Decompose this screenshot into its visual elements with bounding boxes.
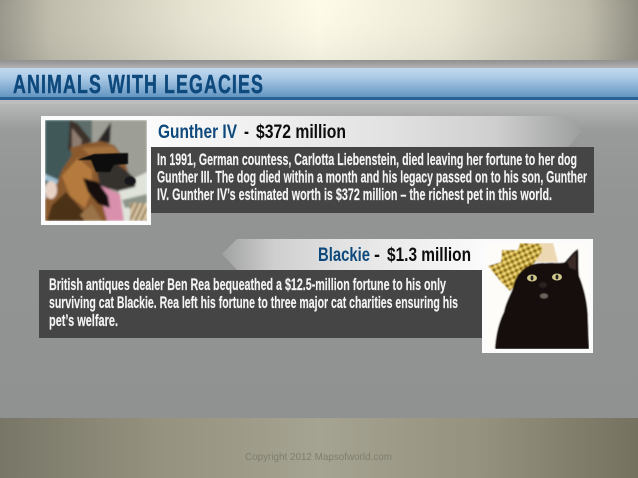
content background xyxy=(0,98,638,418)
heading: Blackie: - xyxy=(374,244,380,266)
cat xyxy=(495,249,589,349)
heading arrow: Blackie xyxy=(222,239,486,270)
dog head and body xyxy=(45,141,128,221)
muzzle xyxy=(97,163,136,191)
copyright: Copyright 2012 Mapsofworld.com xyxy=(245,451,392,463)
mouth xyxy=(83,178,110,208)
bottom band xyxy=(0,418,638,478)
heading: Blackie: $1.3 million xyxy=(387,244,471,266)
sunglasses xyxy=(77,153,128,172)
panel: Blackie xyxy=(39,239,593,353)
top band xyxy=(0,0,638,60)
tongue xyxy=(97,184,124,221)
eyes xyxy=(527,274,537,282)
text box: Gunther IV xyxy=(151,147,594,213)
heading: Blackie: Blackie xyxy=(318,244,370,266)
mouth xyxy=(540,294,548,298)
panel: Gunther IV xyxy=(41,116,594,225)
photo: black cat with crown xyxy=(482,239,593,353)
heading arrow: Gunther IV xyxy=(148,116,582,147)
dog ears xyxy=(68,120,91,152)
crown xyxy=(488,243,543,291)
heading: Gunther IV: Gunther IV xyxy=(158,121,237,143)
heading: Gunther IV: $372 million xyxy=(256,121,346,143)
photo: dog in sunglasses xyxy=(41,116,151,225)
title: ANIMALS WITH LEGACIES xyxy=(13,71,264,99)
heading: Gunther IV xyxy=(158,121,346,143)
text box: Blackie xyxy=(39,270,482,338)
text box: Blackie: pet’s welfare. xyxy=(49,311,118,330)
header bar xyxy=(0,60,638,104)
heading: Gunther IV: - xyxy=(244,121,249,143)
heading: Blackie xyxy=(318,244,471,266)
